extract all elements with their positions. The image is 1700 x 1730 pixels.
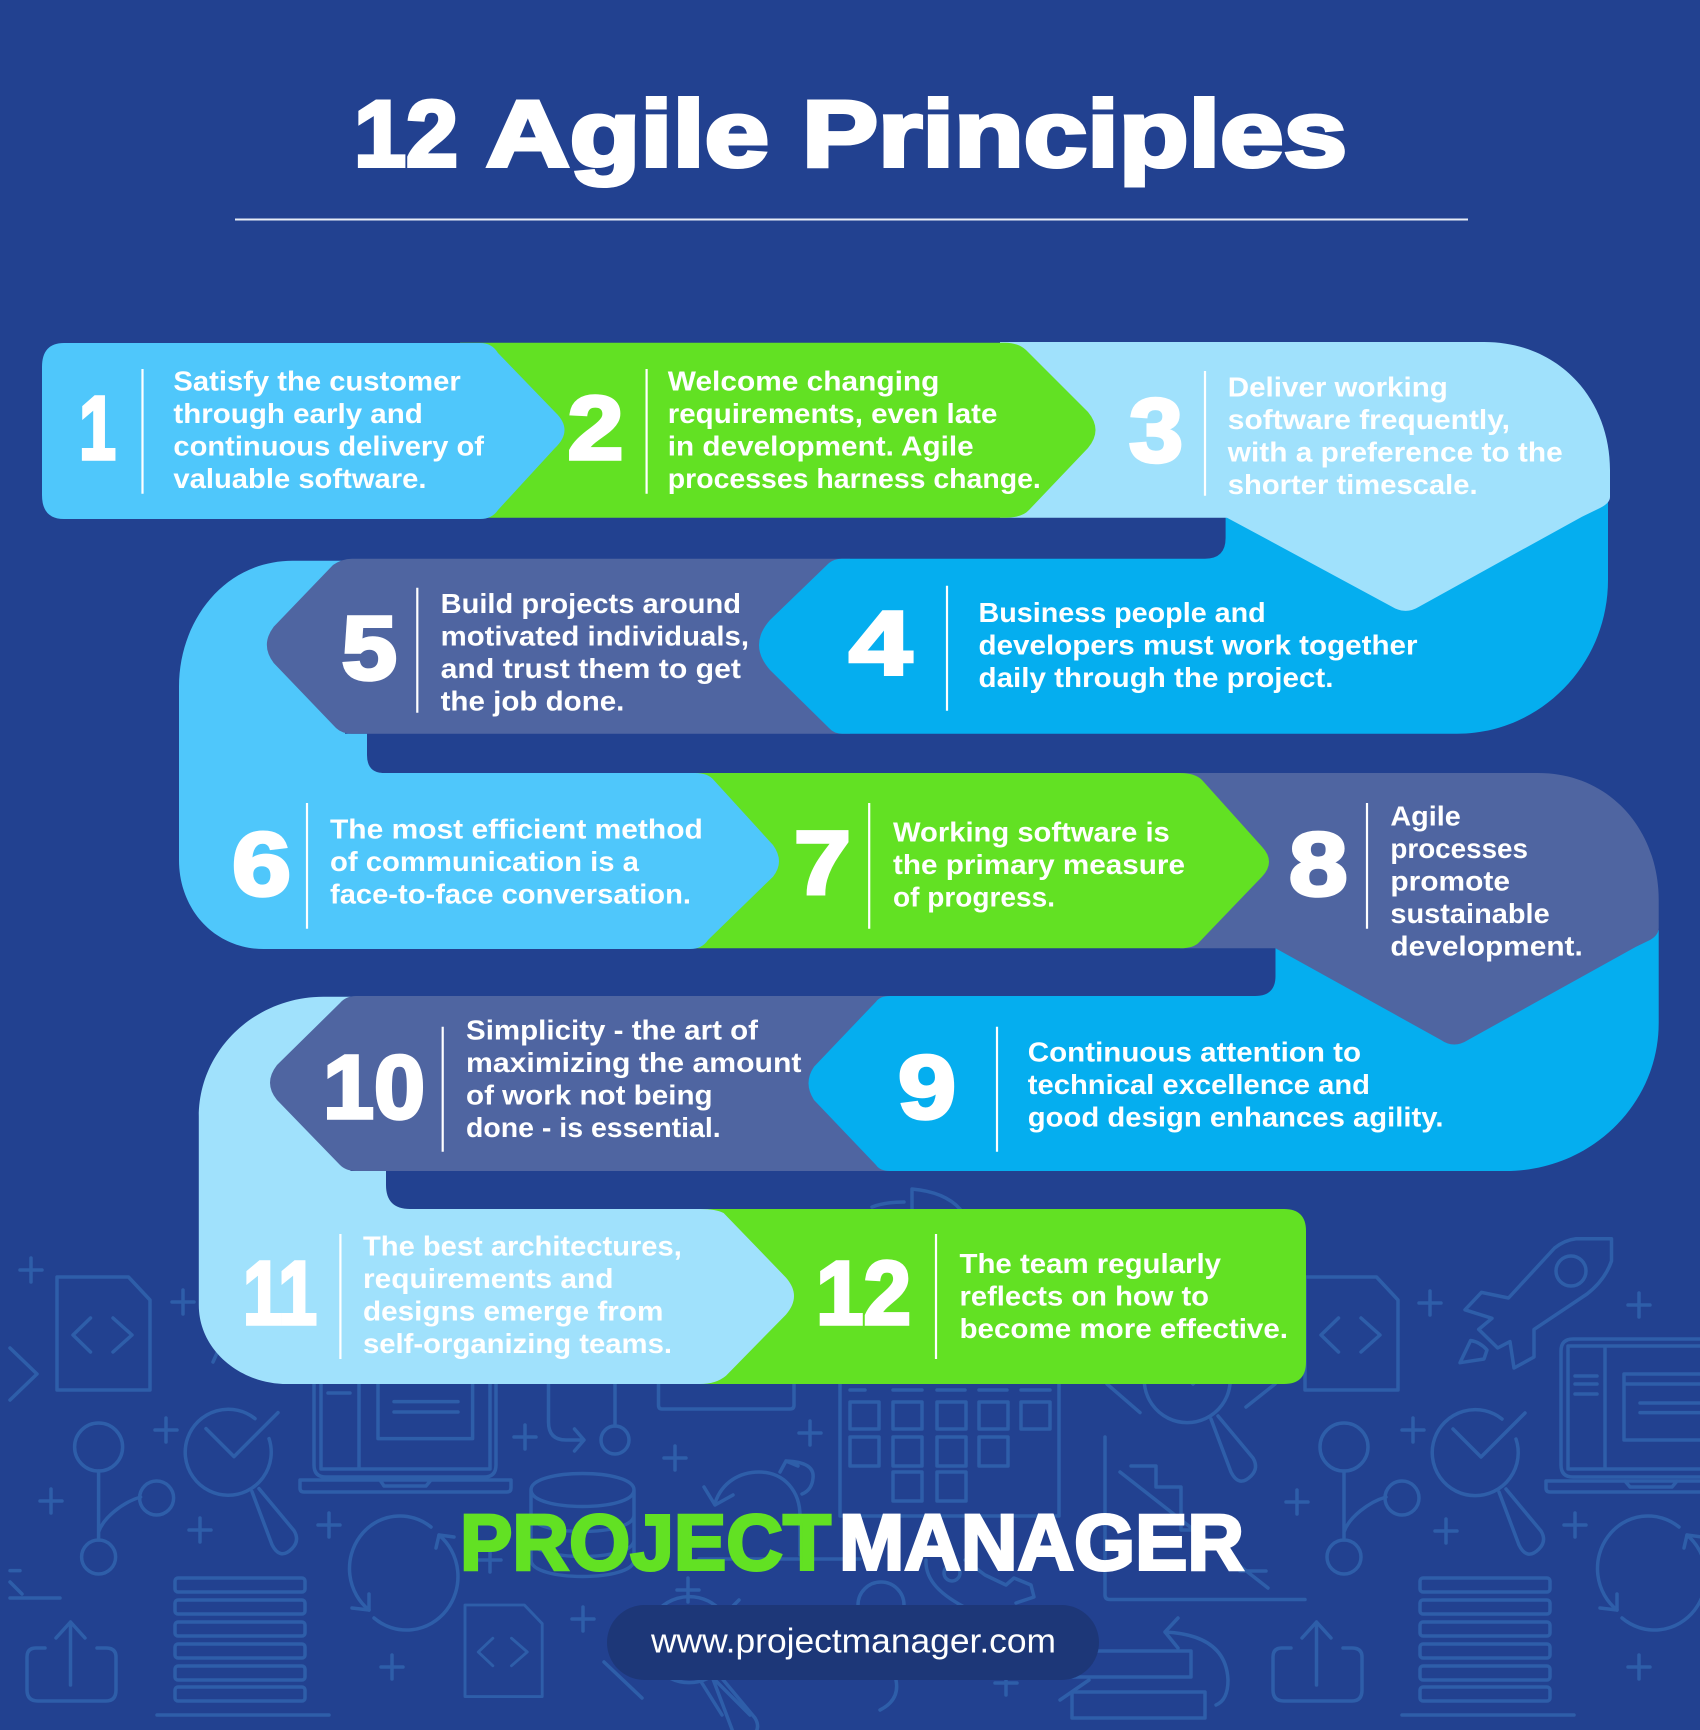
background icon pattern — [10, 1189, 1700, 1730]
panel: principle 2 — [460, 343, 1096, 518]
panel: principle 11 — [199, 997, 794, 1384]
text: principle 9 — [1028, 1036, 1444, 1132]
panel: principle 5 — [267, 559, 850, 734]
small rect — [658, 1384, 794, 1409]
text: principle 4: developers must work together — [978, 630, 1418, 660]
text: principle 5: and trust them to get — [441, 653, 741, 684]
text: principle 12: reflects on how to — [960, 1280, 1209, 1312]
text: principle 10: done - is essential. — [466, 1112, 721, 1143]
text: principle 6: of communication is a — [330, 846, 639, 877]
logo: ProjectManager: MANAGER — [839, 1498, 1244, 1586]
rocket top fragment — [872, 1189, 960, 1209]
title: 12 — [354, 81, 458, 186]
title: Agile — [486, 81, 769, 186]
text: principle 5: Build projects around — [441, 588, 741, 619]
logo: ProjectManager — [460, 1498, 1244, 1586]
number 3: 3 — [1129, 382, 1183, 482]
text: principle 12: The team regularly — [960, 1248, 1221, 1279]
small cycle — [699, 1461, 860, 1559]
website pill — [607, 1605, 1099, 1680]
title — [354, 81, 1347, 186]
text: principle 10: maximizing the amount — [466, 1047, 802, 1078]
text: principle 8: Agile — [1390, 800, 1461, 832]
text: principle 10: of work not being — [466, 1080, 713, 1110]
panel: principle 10 — [270, 996, 900, 1171]
text: principle 1: continuous delivery of — [173, 430, 485, 462]
text: principle 11: requirements and — [363, 1263, 614, 1294]
text: principle 5 — [441, 588, 749, 716]
title: Principles — [802, 81, 1347, 186]
text: principle 9: Continuous attention to — [1028, 1036, 1361, 1068]
calendar — [840, 1384, 1059, 1516]
text: principle 7: Working software is — [893, 816, 1170, 848]
text: principle 1: through early and — [173, 398, 423, 429]
text: principle 9: good design enhances agility. — [1028, 1102, 1444, 1132]
text: principle 8: processes — [1390, 833, 1528, 864]
website url: www.projectmanager.com — [650, 1622, 1056, 1660]
text: principle 11: self-organizing teams. — [363, 1328, 672, 1359]
rocket behind pill — [858, 1560, 1034, 1610]
panel: principle 8 — [1180, 773, 1659, 1044]
number 2: 2 — [568, 379, 624, 479]
number 5: 5 — [342, 599, 397, 699]
chart — [1105, 1437, 1305, 1600]
text: principle 2: Welcome changing — [668, 366, 939, 397]
text: principle 8: sustainable — [1390, 898, 1550, 929]
text: principle 6: face-to-face conversation. — [330, 878, 691, 910]
text: principle 3: shorter timescale. — [1228, 469, 1478, 500]
bits below pill — [604, 1662, 1089, 1710]
text: principle 6 — [330, 814, 703, 910]
text: principle 8: promote — [1390, 866, 1510, 896]
arrow path and node — [548, 1384, 615, 1451]
text: principle 6: The most efficient method — [330, 814, 703, 844]
panel: principle 7 — [690, 773, 1269, 948]
rocket — [1465, 1239, 1612, 1368]
laptop left — [300, 1380, 511, 1492]
text: principle 12: become more effective. — [960, 1313, 1288, 1344]
text: principle 3 — [1227, 372, 1563, 500]
number 9: 9 — [898, 1038, 956, 1138]
text: principle 3: with a preference to the — [1227, 437, 1563, 468]
panel: principle 12 — [700, 1209, 1306, 1384]
text: principle 2 — [668, 366, 1041, 494]
number 8: 8 — [1289, 815, 1348, 915]
text: principle 4: daily through the project. — [978, 662, 1334, 693]
text: principle 2: in development. Agile — [668, 430, 974, 462]
text: principle 7: of progress. — [893, 882, 1055, 912]
text: principle 11: The best architectures, — [363, 1230, 682, 1262]
text: principle 4: Business people and — [978, 597, 1266, 628]
text: principle 2: processes harness change. — [668, 463, 1041, 494]
text: principle 7 — [893, 816, 1185, 912]
logo: ProjectManager: PROJECT — [460, 1498, 831, 1586]
panel: principle 4 — [759, 500, 1608, 734]
number 10: 10 — [323, 1038, 425, 1138]
number 11: 11 — [243, 1244, 317, 1344]
text: principle 7: the primary measure — [893, 849, 1185, 880]
text: principle 5: motivated individuals, — [441, 620, 749, 652]
database — [531, 1474, 634, 1576]
text: principle 1: valuable software. — [173, 463, 426, 494]
text: principle 1: Satisfy the customer — [173, 366, 461, 397]
text: principle 11: designs emerge from — [363, 1296, 663, 1326]
text: principle 10: Simplicity - the art of — [466, 1014, 759, 1046]
text: principle 8 — [1390, 800, 1583, 962]
laptop right — [1546, 1339, 1700, 1492]
panel: principle 1 — [42, 343, 564, 519]
panel: principle 9 — [808, 930, 1659, 1171]
text: principle 1 — [173, 366, 485, 494]
text: principle 2: requirements, even late — [668, 398, 997, 429]
return arrows — [1072, 1618, 1228, 1718]
panel: principle 3 — [1000, 342, 1610, 611]
text: principle 8: development. — [1390, 930, 1583, 962]
text: principle 4 — [978, 597, 1418, 693]
text: principle 12 — [960, 1248, 1288, 1344]
number 4: 4 — [849, 594, 912, 694]
number 6: 6 — [232, 815, 291, 915]
number 1: 1 — [79, 379, 116, 479]
text: principle 3: software frequently, — [1228, 404, 1510, 435]
text: principle 5: the job done. — [441, 686, 624, 716]
number 12: 12 — [816, 1244, 911, 1344]
text: principle 11 — [363, 1230, 682, 1359]
text: principle 9: technical excellence and — [1028, 1069, 1370, 1100]
title underline — [235, 218, 1468, 220]
text: principle 10 — [466, 1014, 802, 1143]
panel: principle 6 — [179, 561, 779, 949]
text: principle 3: Deliver working — [1228, 372, 1448, 403]
number 7: 7 — [794, 814, 851, 914]
